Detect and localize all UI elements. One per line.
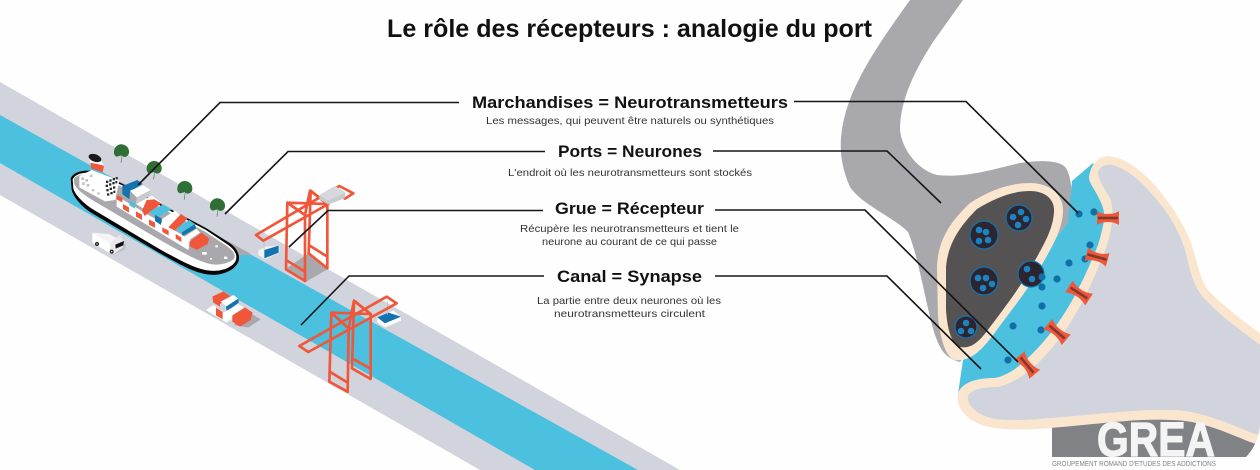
trees (114, 144, 225, 217)
label: canal: Canal = Synapse (557, 267, 702, 286)
label: grue: Grue = Récepteur (555, 199, 704, 218)
label: marchandises: Les messages, qui peuvent être naturels ou synthétiques (486, 115, 774, 127)
container ship (71, 152, 250, 275)
crane 1 (256, 186, 353, 282)
label: grue: Récupère les neurotransmetteurs et tient le (520, 223, 739, 235)
GREA logo: GROUPEMENT ROMAND D'ETUDES DES ADDICTIONS (1052, 459, 1216, 468)
quay shadow (113, 180, 250, 255)
label: grue: neurone au courant de ce qui passe (542, 236, 717, 248)
quay road (0, 82, 680, 470)
small container (258, 246, 279, 259)
presynaptic bouton (937, 183, 1063, 360)
crane 2 (299, 297, 401, 392)
label: canal: neurotransmetteurs circulent (554, 308, 705, 320)
label: ports: L'endroit où les neurotransmetteurs sont stockés (508, 167, 752, 179)
label: canal: La partie entre deux neurones où les (537, 295, 721, 307)
receptors (1014, 211, 1119, 379)
label: ports (508, 142, 752, 179)
vesicles (955, 205, 1044, 338)
canal water (0, 115, 638, 470)
label: ports: Ports = Neurones (558, 142, 702, 161)
label: marchandises: Marchandises = Neurotransmetteurs (472, 93, 788, 112)
label: canal (537, 267, 721, 320)
delivery truck (92, 233, 126, 255)
label: grue (520, 199, 739, 248)
funnel (90, 161, 104, 172)
containers (122, 180, 143, 199)
containers on the quay (206, 291, 261, 328)
GREA logo (1052, 414, 1216, 468)
crane shadow (287, 253, 327, 282)
presynaptic axon (841, 0, 1072, 362)
label: marchandises (472, 93, 788, 127)
small container blue (377, 311, 401, 327)
title: Le rôle des récepteurs : analogie du port (387, 15, 873, 43)
neurotransmitters (1004, 208, 1098, 364)
GREA logo: GREA (1097, 414, 1215, 467)
panel: neurons (841, 0, 1260, 457)
deck marks (202, 245, 227, 260)
hull (71, 171, 239, 275)
postsynaptic neuron (958, 156, 1260, 446)
synaptic cleft (958, 163, 1108, 394)
checker side (117, 196, 191, 250)
trolley (319, 186, 345, 204)
panel: canal scene (0, 82, 680, 470)
corner mask (1215, 425, 1260, 470)
leader lines (138, 102, 1078, 369)
superstructure (79, 170, 119, 201)
vesicle dots (958, 209, 1035, 334)
GREA logo background (1052, 415, 1260, 457)
